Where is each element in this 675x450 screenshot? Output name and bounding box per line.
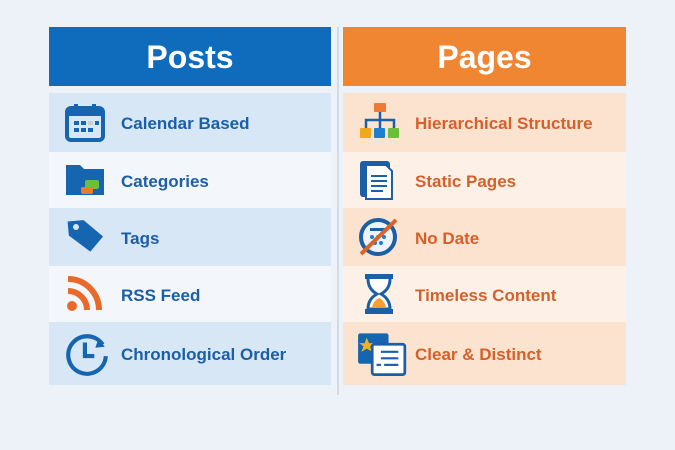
heading: Pages: Pages <box>437 39 532 75</box>
row: Chronological Order <box>49 322 331 385</box>
row: Static Pages <box>343 152 626 208</box>
row: Hierarchical Structure <box>343 93 626 152</box>
row: Categories: Categories <box>121 172 209 190</box>
heading: Posts: Posts <box>146 39 234 75</box>
row: Clear & Distinct: Clear & Distinct <box>415 345 542 364</box>
row: Timeless Content: Timeless Content <box>415 286 556 304</box>
row: Chronological Order: Chronological Order <box>121 345 286 364</box>
row: Calendar Based: Calendar Based <box>121 114 250 133</box>
row: Categories <box>49 152 331 208</box>
row: Clear & Distinct <box>343 322 626 385</box>
row: No Date <box>343 208 626 266</box>
row: Static Pages: Static Pages <box>415 172 516 190</box>
panel: posts <box>49 93 331 385</box>
heading: Pages <box>343 27 626 86</box>
row: Hierarchical Structure: Hierarchical Structure <box>415 114 593 133</box>
row: Tags <box>49 208 331 266</box>
row: No Date: No Date <box>415 228 479 248</box>
heading: Posts <box>49 27 331 86</box>
row: Timeless Content <box>343 266 626 322</box>
panel: pages <box>343 93 626 385</box>
divider <box>337 27 339 395</box>
row: RSS Feed <box>49 266 331 322</box>
row: Tags: Tags <box>121 228 159 248</box>
row: RSS Feed: RSS Feed <box>121 286 200 304</box>
row: Calendar Based <box>49 93 331 152</box>
